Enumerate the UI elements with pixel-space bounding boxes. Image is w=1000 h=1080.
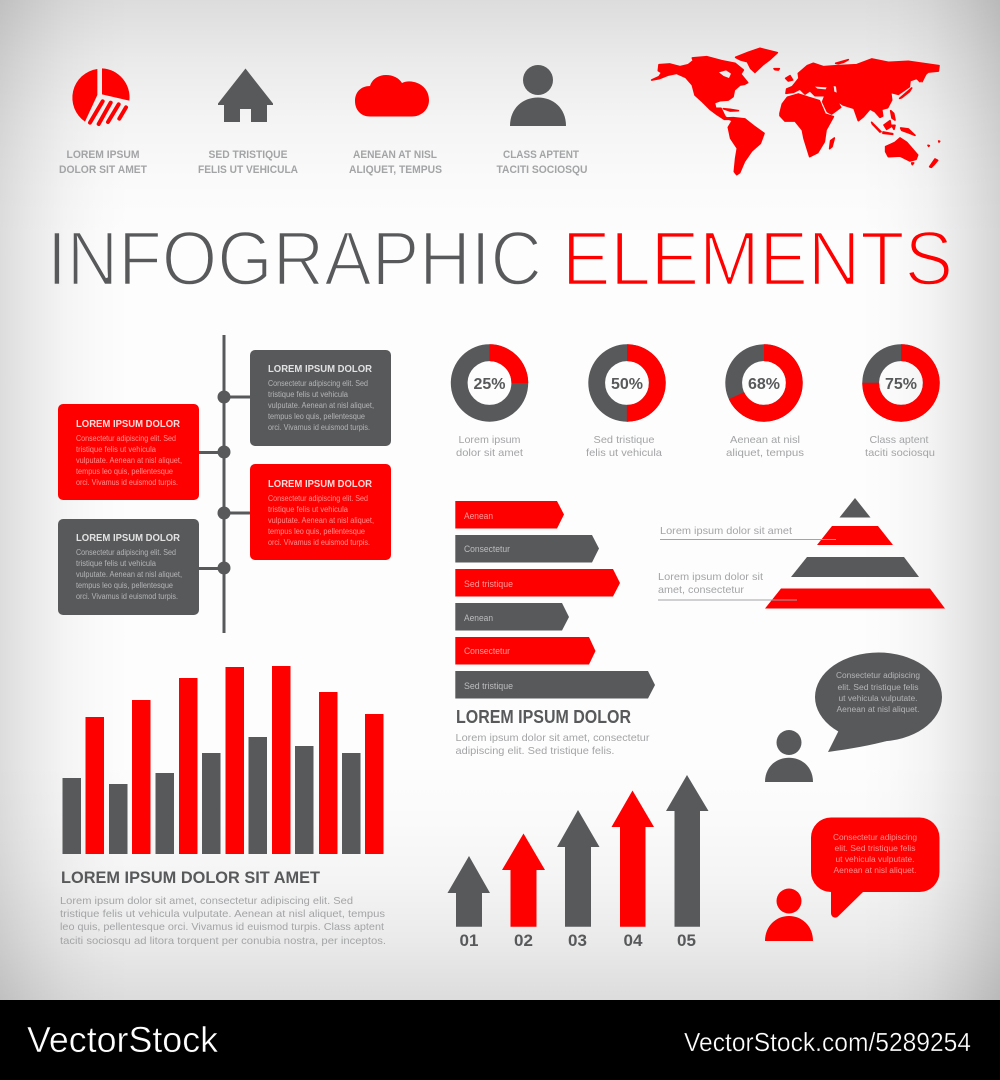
speech bubble: gray: ut vehicula vulputate. bbox=[838, 694, 918, 703]
donut chart: 75%: Class aptent bbox=[870, 434, 929, 446]
speech bubble: gray: Consectetur adipiscing bbox=[836, 671, 920, 680]
speech bubble: red bbox=[811, 818, 940, 918]
bars description: Lorem ipsum dolor sit amet, consectetur bbox=[456, 732, 650, 744]
arrow 04: 04 bbox=[624, 931, 643, 950]
bar chart heading: LOREM IPSUM DOLOR SIT AMET bbox=[61, 868, 321, 887]
timeline card: gray top: tristique felis ut vehicula bbox=[268, 390, 349, 399]
label: pie icon: LOREM IPSUM bbox=[66, 149, 140, 161]
label: person icon bbox=[496, 149, 588, 176]
arrow 01: 01 bbox=[460, 931, 478, 950]
bar: Consectetur bbox=[455, 535, 599, 562]
timeline card: red left: vulputate. Aenean at nisl aliquet, bbox=[76, 456, 182, 465]
donut chart: 68% bbox=[726, 353, 804, 459]
icon: house bbox=[218, 68, 273, 122]
bar: Aenean bbox=[455, 603, 569, 630]
timeline card: gray top: tempus leo quis, pellentesque bbox=[268, 412, 365, 421]
bar: Sed tristique: Sed tristique bbox=[464, 579, 513, 589]
title bbox=[47, 216, 953, 302]
donut chart: 25%: dolor sit amet bbox=[456, 447, 523, 459]
donut chart: 68%: aliquet, tempus bbox=[726, 447, 804, 459]
arrow 05: 05 bbox=[677, 931, 696, 950]
speech bubble: red: Aenean at nisl aliquet. bbox=[834, 866, 916, 875]
label: cloud icon: AENEAN AT NISL bbox=[353, 149, 437, 161]
icon: cloud bbox=[355, 75, 429, 116]
timeline card: gray left: tempus leo quis, pellentesque bbox=[76, 581, 173, 590]
timeline card: red left bbox=[58, 404, 199, 500]
label: person icon: CLASS APTENT bbox=[503, 149, 579, 161]
donut chart: 25%: 25% bbox=[473, 376, 506, 393]
bar: Sed tristique bbox=[455, 671, 655, 698]
label: pie icon bbox=[59, 149, 147, 176]
timeline card: gray top: LOREM IPSUM DOLOR bbox=[268, 364, 373, 375]
timeline card: gray left bbox=[58, 519, 199, 615]
timeline card: gray left: vulputate. Aenean at nisl aliquet, bbox=[76, 570, 182, 579]
timeline card: red left: Consectetur adipiscing elit. Sed bbox=[76, 434, 176, 443]
timeline card: red right: Consectetur adipiscing elit. Sed bbox=[268, 494, 368, 503]
timeline card: red right: LOREM IPSUM DOLOR bbox=[268, 479, 373, 490]
footer logo: VectorStock bbox=[27, 1019, 219, 1060]
timeline card: gray top: vulputate. Aenean at nisl aliquet, bbox=[268, 401, 374, 410]
pyramid label 1: Lorem ipsum dolor sit amet bbox=[660, 525, 792, 537]
arrow 03 bbox=[557, 810, 600, 950]
timeline card: gray left: orci. Vivamus id euismod turpis. bbox=[76, 592, 178, 601]
bar: Aenean bbox=[455, 501, 564, 528]
donut chart: 25% bbox=[456, 353, 523, 459]
bars description bbox=[456, 732, 650, 757]
timeline bbox=[58, 335, 391, 633]
timeline card: gray top: orci. Vivamus id euismod turpis. bbox=[268, 423, 370, 432]
bar: Aenean: Aenean bbox=[464, 613, 493, 623]
icon: pie chart bbox=[72, 68, 130, 124]
title: ELEMENTS bbox=[562, 216, 953, 302]
timeline card: red left: orci. Vivamus id euismod turpis. bbox=[76, 478, 178, 487]
arrow 04 bbox=[612, 790, 654, 950]
bar chart bbox=[62, 666, 384, 854]
donut chart: 25%: Lorem ipsum bbox=[458, 434, 521, 446]
label: cloud icon bbox=[349, 149, 442, 176]
label: house icon bbox=[198, 149, 298, 176]
pyramid label 2: Lorem ipsum dolor sit bbox=[658, 571, 763, 583]
footer bar bbox=[0, 1000, 1000, 1080]
timeline card: red left: tristique felis ut vehicula bbox=[76, 445, 157, 454]
label: person icon: TACITI SOCIOSQU bbox=[496, 164, 588, 176]
label: cloud icon: ALIQUET, TEMPUS bbox=[349, 164, 442, 176]
label: pie icon: DOLOR SIT AMET bbox=[59, 164, 147, 176]
icon: red person bbox=[765, 888, 813, 941]
pyramid bbox=[765, 498, 945, 608]
bar chart description: tristique felis ut vehicula vulputate. Aenean at nisl aliquet, tempus bbox=[60, 908, 385, 920]
donut chart: 68%: 68% bbox=[748, 376, 780, 393]
donut chart: 75% bbox=[865, 353, 935, 459]
timeline card: red left: LOREM IPSUM DOLOR bbox=[76, 419, 181, 430]
bar: Consectetur: Consectetur bbox=[464, 544, 510, 554]
pyramid label 2: amet, consectetur bbox=[658, 584, 745, 596]
bar chart description: taciti sociosqu ad litora torquent per conubia nostra, per inceptos. bbox=[60, 935, 386, 947]
bar chart description bbox=[60, 895, 386, 947]
arrow 02 bbox=[502, 834, 545, 950]
timeline card: gray top: Consectetur adipiscing elit. Sed bbox=[268, 379, 368, 388]
speech bubble: gray bbox=[815, 652, 942, 752]
icon: person bbox=[510, 65, 566, 126]
timeline card: red right: vulputate. Aenean at nisl aliquet, bbox=[268, 516, 374, 525]
donut chart: 50%: felis ut vehicula bbox=[586, 447, 662, 459]
speech bubble: red: elit. Sed tristique felis bbox=[834, 844, 916, 853]
footer url: VectorStock.com/5289254 bbox=[684, 1027, 971, 1057]
speech bubble: red: Consectetur adipiscing bbox=[833, 833, 917, 842]
bar chart description: leo quis, pellentesque orci. Vivamus id euismod turpis. Class aptent bbox=[60, 921, 384, 933]
label: house icon: SED TRISTIQUE bbox=[208, 149, 288, 161]
arrow 02: 02 bbox=[514, 931, 533, 950]
map: lakes and seas bbox=[719, 70, 837, 93]
bar: Sed tristique bbox=[455, 569, 620, 596]
timeline card: red right: tempus leo quis, pellentesque bbox=[268, 527, 365, 536]
arrow 03: 03 bbox=[568, 931, 587, 950]
label: house icon: FELIS UT VEHICULA bbox=[198, 164, 298, 176]
title: INFOGRAPHIC bbox=[47, 216, 542, 302]
speech bubble: red: ut vehicula vulputate. bbox=[836, 855, 914, 864]
pyramid label 2 bbox=[658, 571, 797, 600]
world map bbox=[652, 48, 940, 175]
bar: Aenean: Aenean bbox=[464, 511, 493, 521]
donut chart: 50%: Sed tristique bbox=[594, 434, 655, 446]
arrow 05 bbox=[666, 775, 708, 950]
arrow bars bbox=[455, 501, 655, 698]
timeline card: gray top bbox=[250, 350, 391, 446]
donut chart: 50%: 50% bbox=[611, 376, 643, 393]
timeline card: gray left: Consectetur adipiscing elit. Sed bbox=[76, 548, 176, 557]
donut chart: 68%: Aenean at nisl bbox=[730, 434, 800, 446]
timeline card: gray left: LOREM IPSUM DOLOR bbox=[76, 533, 181, 544]
bar: Consectetur: Consectetur bbox=[464, 646, 510, 656]
arrow 01 bbox=[448, 856, 490, 950]
timeline card: red right: orci. Vivamus id euismod turpis. bbox=[268, 538, 370, 547]
timeline card: red left: tempus leo quis, pellentesque bbox=[76, 467, 173, 476]
bars description: adipiscing elit. Sed tristique felis. bbox=[456, 745, 614, 757]
speech bubble: gray: elit. Sed tristique felis bbox=[838, 683, 918, 692]
timeline axis bbox=[198, 335, 251, 633]
bars heading: LOREM IPSUM DOLOR bbox=[456, 707, 631, 727]
bar: Consectetur bbox=[455, 637, 596, 664]
timeline card: red right bbox=[250, 464, 391, 560]
bar chart description: Lorem ipsum dolor sit amet, consectetur adipiscing elit. Sed bbox=[60, 895, 353, 907]
donut chart: 75%: taciti sociosqu bbox=[865, 447, 935, 459]
donut chart: 50% bbox=[586, 353, 662, 459]
bar: Sed tristique: Sed tristique bbox=[464, 681, 513, 691]
speech bubble: gray: Aenean at nisl aliquet. bbox=[836, 705, 920, 714]
icon: gray person bbox=[765, 730, 813, 782]
timeline card: red right: tristique felis ut vehicula bbox=[268, 505, 349, 514]
timeline card: gray left: tristique felis ut vehicula bbox=[76, 559, 157, 568]
donut chart: 75%: 75% bbox=[885, 376, 917, 393]
